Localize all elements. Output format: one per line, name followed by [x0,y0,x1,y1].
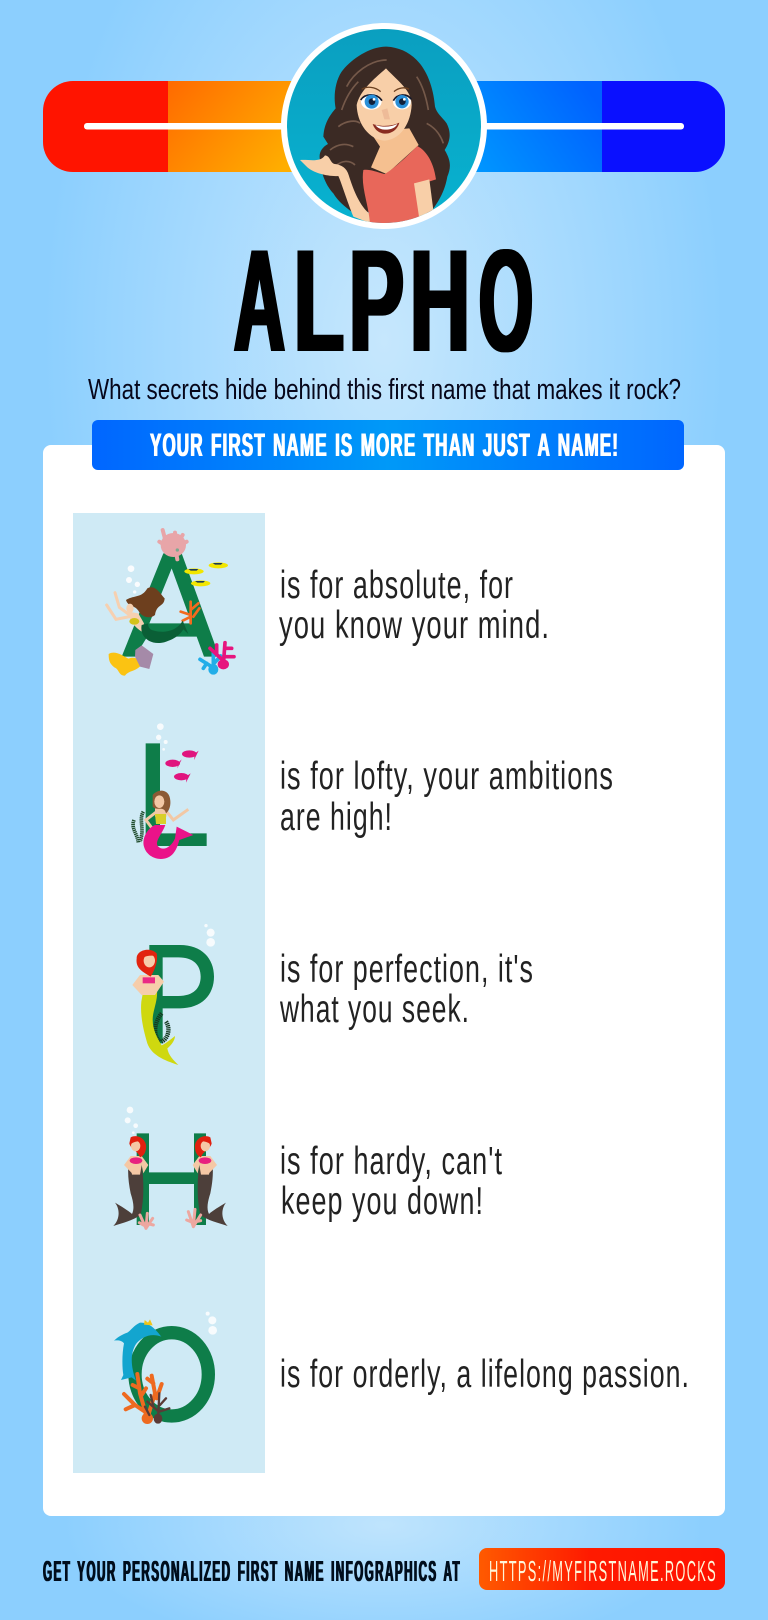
title [234,219,533,382]
pink corals [139,1209,201,1228]
header bar left [43,81,318,172]
orange corals [124,1374,162,1424]
magenta coral [210,643,234,669]
text: L: is for lofty, your ambitions [280,755,614,798]
header white line [84,123,684,130]
seaweed [155,1013,168,1042]
text: O [479,219,533,382]
letter H illustration [113,1107,228,1228]
blue coral [200,652,221,675]
bubbles [125,1107,138,1134]
banner [92,420,684,470]
text: H: keep you down! [281,1180,484,1223]
letters column background [73,513,265,1473]
letter A glyph [122,553,219,657]
orange coral [181,602,199,623]
title: L [294,219,344,382]
mermaid [143,791,193,859]
letter P illustration [132,924,215,1065]
letter H glyph [137,1133,206,1225]
yellow fish [184,562,228,586]
title: P [349,219,404,382]
avatar [281,23,487,229]
mermaid [132,950,178,1065]
purple coral [135,645,153,669]
letter L glyph [146,743,207,846]
text: L: are high! [280,796,393,839]
text: A: is for absolute, for [280,564,514,607]
coral pink [159,530,187,559]
seaweed [133,812,143,843]
text: A: you know your mind. [279,604,550,647]
letter O glyph [135,1333,208,1416]
letter P glyph [149,945,214,1043]
footer url button [479,1548,725,1590]
text: H: is for hardy, can't [280,1140,503,1183]
text: P: what you seek. [279,988,470,1031]
bubbles [204,924,215,947]
letter L illustration [133,723,207,859]
crown [144,1319,153,1325]
text: P [279,948,534,1031]
mermaid [107,587,188,643]
text: P: is for perfection, it's [280,948,534,991]
left mermaid [113,1136,148,1226]
dolphin [114,1323,161,1381]
right mermaid [193,1136,228,1226]
text: H [280,1140,503,1223]
letter A illustration [107,530,234,676]
letter O illustration [114,1312,217,1424]
text: A [279,564,550,647]
dark coral [145,1393,169,1424]
header bar right [450,81,725,172]
title: A [234,219,285,382]
magenta fish [165,750,199,783]
title: H [410,219,470,382]
text: L [280,755,614,839]
bubbles [126,565,140,594]
bubbles [156,723,168,751]
yellow coral [109,653,141,676]
white panel [43,445,725,1516]
bubbles [206,1312,217,1335]
